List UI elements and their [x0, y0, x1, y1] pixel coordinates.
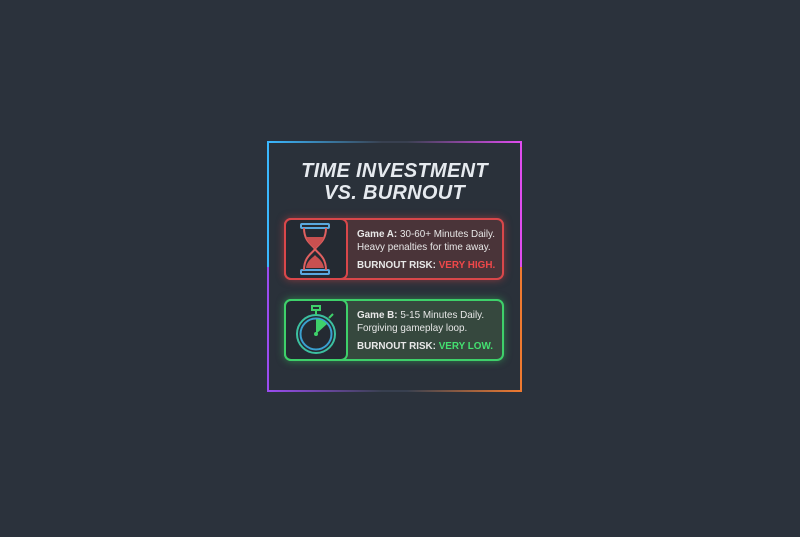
text: Game A: Heavy penalties for time away.	[357, 241, 491, 253]
text: Game B: BURNOUT RISK: VERY LOW.	[357, 340, 493, 352]
text: Game B: Forgiving gameplay loop.	[357, 322, 467, 334]
icon: stopwatch	[284, 299, 348, 361]
panel: frame	[267, 141, 522, 392]
text: Game A: Game A: 30-60+ Minutes Daily.	[357, 228, 495, 240]
title: VS. BURNOUT	[324, 182, 465, 204]
title	[301, 160, 489, 204]
title: TIME INVESTMENT	[301, 160, 488, 182]
icon: hourglass	[284, 218, 348, 280]
card: Game B	[284, 299, 504, 361]
text: Game A: BURNOUT RISK: VERY HIGH.	[357, 259, 495, 271]
text: Game B: Game B: 5-15 Minutes Daily.	[357, 309, 484, 321]
card: Game A	[284, 218, 504, 280]
text: Game B	[357, 309, 493, 352]
text: Game A	[357, 228, 495, 271]
